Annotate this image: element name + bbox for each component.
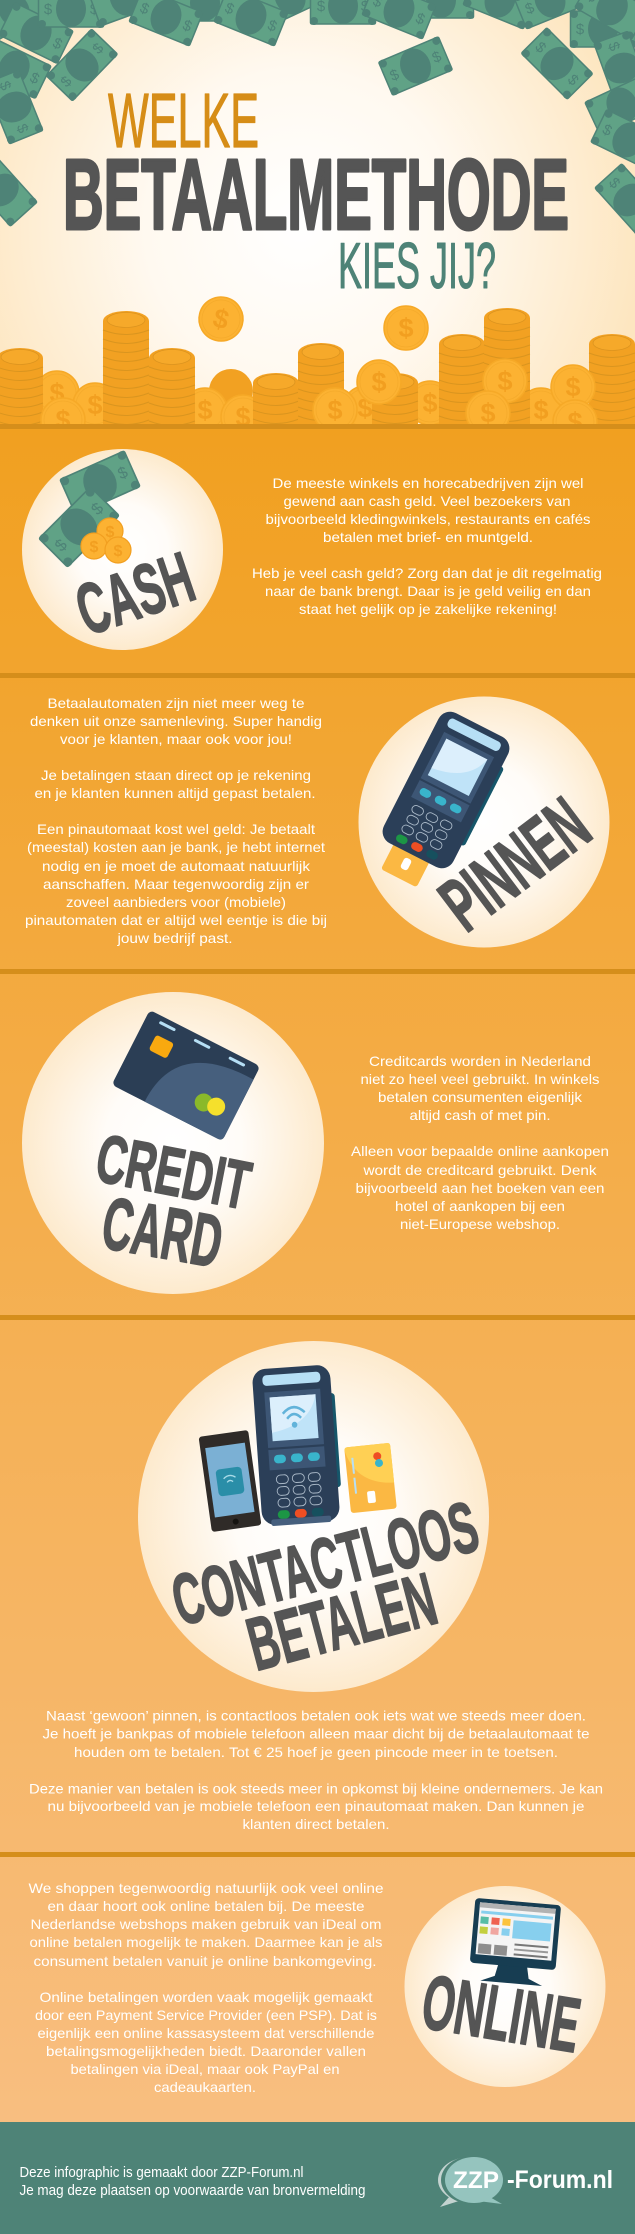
- falling money bills: $: [27, 69, 43, 88]
- text: credit card: Alleen voor bepaalde online aankopen: [351, 1143, 609, 1159]
- text: pinnen: aanschaffen. Maar tegenwoordig zijn er: [43, 876, 309, 892]
- text: online: Online betalingen worden vaak mogelijk gemaakt: [40, 1989, 373, 2005]
- text: pinnen: en je klanten kunnen altijd gepast betalen.: [34, 785, 316, 801]
- footer: [0, 2122, 635, 2234]
- coin stacks and loose coins: $: [49, 378, 65, 408]
- text: online: en daar hoort ook online betalen bij. De meeste: [48, 1898, 365, 1914]
- text: pinnen: pinautomaten dat er altijd wel eentje is die bij: [25, 912, 327, 928]
- sections background: [0, 424, 635, 2122]
- falling money bills: [0, 0, 635, 237]
- text: credit card: wordt de creditcard gebruikt. Denk: [362, 1162, 598, 1178]
- text: online: cadeaukaarten.: [154, 2079, 256, 2095]
- falling money bills: $: [413, 10, 428, 29]
- coin stacks and loose coins: $: [327, 395, 343, 425]
- title: kies jij: KIES JIJ?: [338, 229, 496, 302]
- text: credit card: niet zo heel veel gebruikt. In winkels: [360, 1071, 600, 1087]
- header background: [0, 0, 635, 425]
- coin stacks and loose coins: $: [567, 407, 583, 437]
- text: cash: gewend aan cash geld. Veel bezoekers van: [284, 493, 570, 509]
- icon: cash money and coins: [38, 450, 141, 568]
- text: pinnen: jouw bedrijf past.: [116, 930, 232, 946]
- text: credit card: Creditcards worden in Nederland: [369, 1053, 591, 1069]
- text: contactloos: [29, 1708, 603, 1832]
- text: contactloos: nu bijvoorbeeld van je mobiele telefoon een pinautomaat maken. Dan kunnen je: [48, 1798, 585, 1814]
- text: pinnen: zoveel aanbieders voor (mobiele): [66, 894, 286, 910]
- heading: betalen: BETALEN: [239, 1556, 445, 1686]
- falling money bills: $: [605, 174, 624, 193]
- coin stacks and loose coins: $: [210, 303, 232, 335]
- text: contactloos: Naast ‘gewoon’ pinnen, is contactloos betalen ook iets wat we steeds meer doen.: [46, 1708, 586, 1724]
- icon: cash money and coins: $: [87, 498, 108, 519]
- text: pinnen: denken uit onze samenleving. Super handig: [30, 713, 322, 729]
- text: online: betalingen via iDeal, maar ook PayPal en: [70, 2061, 340, 2077]
- panel: credit card: [22, 992, 609, 1294]
- falling money bills: $: [387, 66, 402, 85]
- coin stacks and loose coins: $: [565, 372, 581, 402]
- text: pinnen: [25, 695, 327, 946]
- text: cash: Heb je veel cash geld? Zorg dan dat je dit regelmatig: [252, 565, 602, 581]
- contactloos circle: [138, 1341, 489, 1692]
- text: credit card: [351, 1053, 609, 1232]
- icon: payment terminal: [378, 707, 517, 874]
- falling money bills: $: [44, 1, 53, 18]
- footer credit text: [20, 2164, 366, 2199]
- title: welke: WELKE: [108, 78, 259, 164]
- falling money bills: $: [180, 17, 195, 36]
- text: cash: bijvoorbeeld kledingwinkels, restaurants en cafés: [266, 511, 590, 527]
- icon: phone: [199, 1430, 261, 1532]
- coin stacks and loose coins: $: [398, 313, 414, 343]
- panel: cash: [22, 449, 602, 651]
- falling money bills: $: [89, 39, 108, 58]
- text: cash: De meeste winkels en horecabedrijven zijn wel: [272, 475, 584, 491]
- text: online: online betalen mogelijk te maken. Daarmee kan je als: [30, 1934, 382, 1950]
- falling money bills: $: [57, 73, 76, 91]
- text: pinnen: voor je klanten, maar ook voor jou!: [60, 731, 292, 747]
- icon: cash money and coins: $: [106, 524, 115, 541]
- heading: card: CARD: [96, 1181, 229, 1284]
- icon: contactless terminal: [252, 1364, 343, 1527]
- falling money bills: $: [265, 17, 280, 36]
- panel: pinnen: [25, 695, 610, 948]
- falling money bills: $: [564, 71, 582, 90]
- text: credit card: hotel of aankopen bij een: [395, 1198, 565, 1214]
- text: contactloos: Je hoeft je bankpas of mobiele telefoon alleen maar dicht bij de betaalautomaat te: [42, 1726, 590, 1742]
- text: cash: naar de bank brengt. Daar is je geld veilig en dan: [265, 583, 591, 599]
- coin stacks and loose coins: $: [197, 395, 213, 425]
- icon: cash money and coins: $: [90, 539, 99, 556]
- cash circle: [22, 449, 223, 650]
- online circle: [404, 1886, 606, 2087]
- text: online: betalingsmogelijkheden biedt. Daaronder vallen: [46, 2043, 366, 2059]
- text: online: door een Payment Service Provider (een PSP). Dat is: [35, 2007, 377, 2023]
- falling money bills: $: [531, 39, 550, 57]
- logo: ZZP-Forum.nl: ZZP: [453, 2167, 499, 2194]
- coin stacks and loose coins: $: [357, 393, 373, 423]
- falling money bills: $: [604, 40, 623, 54]
- icon: cash money and coins: $: [115, 463, 131, 483]
- text: pinnen: Je betalingen staan direct op je rekening: [41, 767, 311, 783]
- text: online: consument betalen vanuit je online bankomgeving.: [34, 1953, 376, 1969]
- falling money bills: $: [90, 1, 99, 18]
- text: pinnen: Betaalautomaten zijn niet meer weg te: [48, 695, 305, 711]
- text: online: [28, 1880, 384, 2095]
- coin stacks and loose coins: $: [87, 390, 103, 420]
- footer credit text: Deze infographic is gemaakt door ZZP-Forum.nl: [20, 2164, 304, 2181]
- coin stacks and loose coins: $: [533, 395, 549, 425]
- text: credit card: altijd cash of met pin.: [410, 1107, 550, 1123]
- text: online: eigenlijk een online kassasysteem dat verschillende: [38, 2025, 375, 2041]
- footer credit text: Je mag deze plaatsen op voorwaarde van bronvermelding: [20, 2182, 366, 2199]
- pinnen circle: [358, 696, 610, 948]
- text: contactloos: Deze manier van betalen is ook steeds meer in opkomst bij kleine ondernemers. Je kan: [29, 1780, 603, 1796]
- text: pinnen: nodig en je moet de automaat natuurlijk: [42, 858, 311, 874]
- text: pinnen: Een pinautomaat kost wel geld: Je betaalt: [37, 821, 315, 837]
- icon: card in terminal: [381, 835, 434, 887]
- footer background: [0, 2122, 635, 2234]
- text: credit card: betalen consumenten eigenlijk: [378, 1089, 583, 1105]
- coin stacks and loose coins: $: [371, 367, 387, 397]
- text: contactloos: klanten direct betalen.: [242, 1816, 390, 1832]
- text: cash: staat het gelijk op je zakelijke rekening!: [299, 601, 557, 617]
- logo: ZZP-Forum.nl: [438, 2156, 613, 2207]
- heading: credit: CREDIT: [90, 1120, 257, 1224]
- coin stacks and loose coins: $: [422, 388, 438, 418]
- falling money bills: $: [576, 21, 585, 38]
- logo: ZZP-Forum.nl: -Forum.nl: [507, 2166, 613, 2194]
- icon: cash money and coins: $: [114, 543, 123, 560]
- icon: credit card: [112, 1010, 260, 1141]
- text: pinnen: (meestal) kosten aan je bank, je hebt internet: [27, 839, 325, 855]
- falling money bills: $: [430, 48, 445, 67]
- falling money bills: $: [50, 35, 65, 54]
- heading: cash: CASH: [66, 538, 204, 651]
- coin stacks and loose coins: $: [497, 366, 513, 396]
- coin stacks and loose coins: $: [55, 405, 71, 435]
- falling money bills: $: [13, 121, 32, 136]
- text: credit card: niet-Europese webshop.: [400, 1216, 560, 1232]
- text: online: We shoppen tegenwoordig natuurlijk ook veel online: [28, 1880, 384, 1896]
- coin stacks and loose coins: $: [235, 402, 251, 432]
- icon: contactless card: [344, 1443, 397, 1513]
- panel: contactloos betalen: [29, 1341, 603, 1832]
- text: cash: [252, 475, 602, 617]
- text: credit card: bijvoorbeeld aan het boeken van een: [356, 1180, 604, 1196]
- text: cash: betalen met brief- en muntgeld.: [323, 529, 533, 545]
- icon: monitor: [468, 1898, 561, 1987]
- coin stacks and loose coins: [0, 292, 635, 513]
- coin stacks and loose coins: $: [480, 398, 496, 428]
- icon: cash money and coins: $: [51, 535, 71, 555]
- text: online: Nederlandse webshops maken gebruik van iDeal om: [30, 1916, 382, 1932]
- panel: online: [28, 1880, 606, 2095]
- credit card circle: [22, 992, 324, 1294]
- text: contactloos: houden om te betalen. Tot € 25 hoef je geen pincode meer in te toetsen.: [74, 1744, 558, 1760]
- falling money bills: $: [600, 121, 615, 140]
